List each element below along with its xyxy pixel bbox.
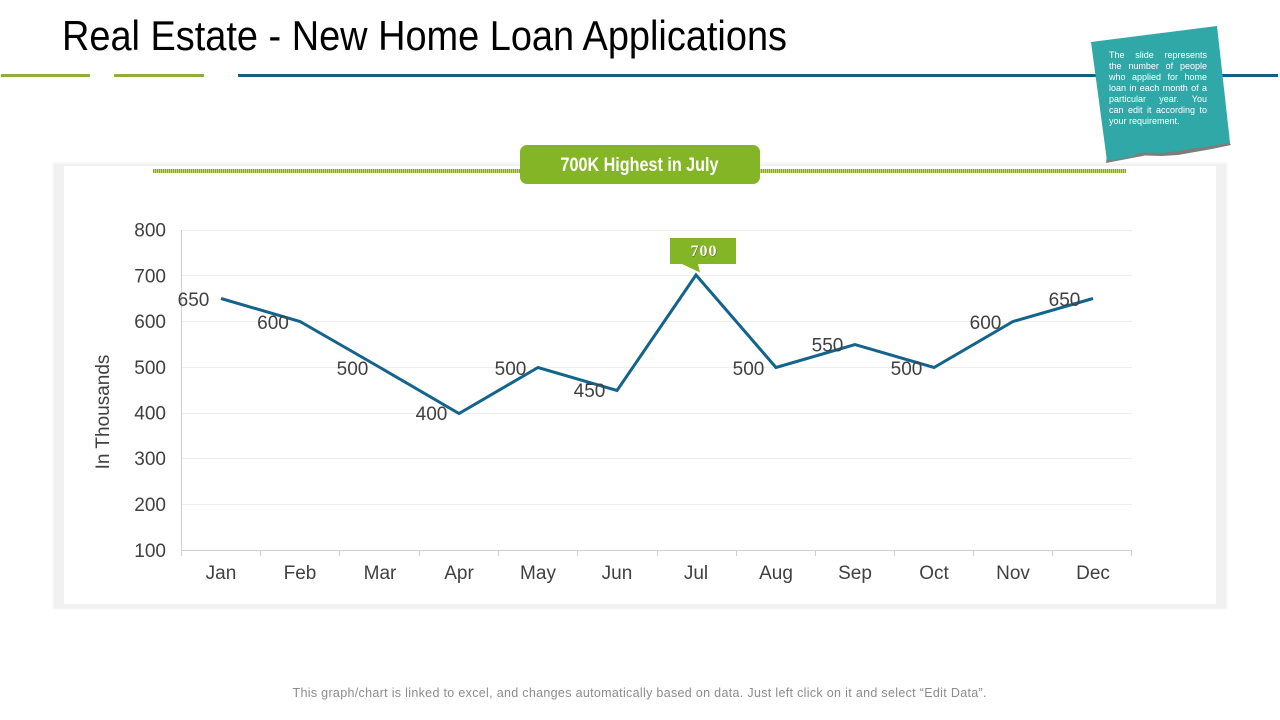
y axis labels (134, 220, 166, 562)
x axis labels: Nov (996, 563, 1030, 584)
peak data callout (670, 238, 736, 272)
data line (221, 275, 1093, 414)
y axis title: In Thousands (93, 355, 114, 469)
dotted accent line (153, 169, 1126, 173)
sticky note text: The slide represents (1109, 50, 1207, 60)
sticky note text: your requirement. (1109, 116, 1180, 126)
peak data callout: 700 (690, 243, 718, 260)
y axis labels: 700 (134, 266, 166, 288)
peak data callout: 700 (691, 244, 718, 260)
y axis labels: 300 (134, 449, 166, 470)
sticky note text: can edit it according to (1109, 105, 1207, 115)
sticky note text (1109, 50, 1207, 126)
gridlines (181, 230, 1132, 504)
data labels: 650 (178, 290, 209, 311)
sticky note shape (1091, 26, 1231, 163)
x axis labels: Feb (284, 563, 316, 584)
data labels: 400 (416, 404, 447, 425)
y axis labels: 600 (134, 312, 166, 333)
data labels: 650 (1049, 290, 1080, 311)
data labels (178, 290, 1080, 425)
data labels: 550 (812, 336, 843, 356)
y axis labels: 400 (134, 404, 166, 424)
sticky note text: loan in each month of a (1109, 83, 1207, 93)
y axis labels: 500 (134, 358, 166, 379)
y axis labels: 100 (134, 541, 166, 562)
x axis labels: Aug (759, 563, 793, 584)
sticky note text: who applied for home (1109, 72, 1207, 82)
callout banner: 700K Highest in July (560, 155, 719, 176)
callout banner (520, 145, 760, 184)
data labels: 600 (257, 313, 289, 334)
data labels: 500 (733, 359, 764, 380)
x axis labels: Apr (444, 563, 474, 584)
data labels: 600 (970, 313, 1001, 334)
y axis labels: 800 (134, 220, 166, 242)
x axis labels: May (520, 563, 556, 584)
data labels: 500 (891, 359, 922, 380)
x axis labels: Oct (919, 563, 949, 584)
sticky note text: the number of people (1109, 61, 1207, 71)
y axis labels: 200 (134, 495, 166, 516)
title: Real Estate - New Home Loan Applications (62, 12, 787, 59)
x axis labels: Jul (684, 563, 708, 584)
x axis labels: Jan (206, 563, 236, 584)
data labels: 500 (495, 359, 526, 380)
header rule: green segments and blue line (1, 74, 1278, 77)
x axis labels (206, 563, 1110, 584)
axes (181, 230, 1132, 556)
x axis labels: Mar (364, 563, 397, 584)
x axis labels: Jun (602, 563, 632, 584)
footnote: This graph/chart is linked to excel, and changes automatically based on data. Just left click on it and select “Edit Data”. (292, 686, 986, 700)
sticky note text: particular year. You (1109, 94, 1207, 104)
panel: chart card (53, 163, 1227, 609)
data labels: 500 (337, 359, 368, 380)
x axis labels: Dec (1076, 563, 1110, 584)
data labels: 450 (574, 381, 605, 402)
line chart (93, 220, 1132, 584)
x axis labels: Sep (838, 563, 872, 584)
